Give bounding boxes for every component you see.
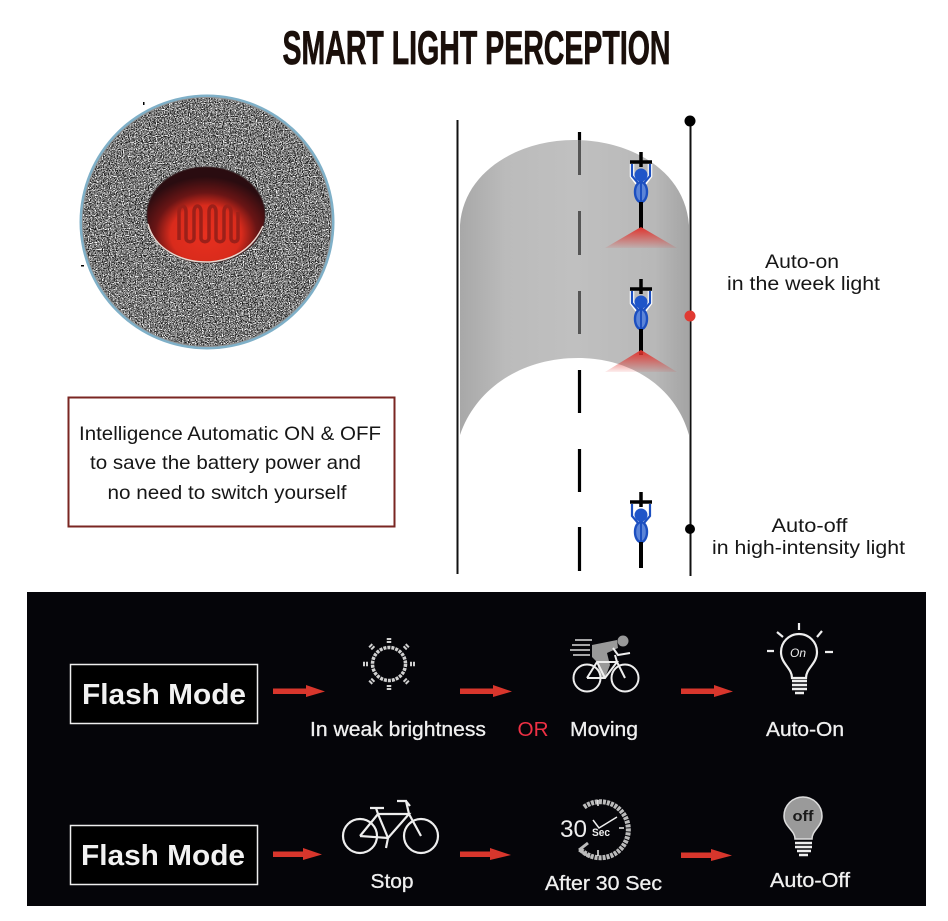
callout: battery text box: [68, 398, 394, 526]
label: after 30 sec: After 30 Sec: [545, 872, 662, 895]
icon: bulb off: [784, 797, 822, 855]
button: flash mode row 2: Flash Mode: [81, 840, 245, 872]
chart: road diagram: [458, 116, 696, 576]
arrow: [273, 685, 325, 697]
icon: bulb on: On: [790, 646, 806, 660]
arrow: [681, 685, 733, 697]
label: auto-on: Auto-on: [765, 251, 839, 273]
icon: parked bicycle: [343, 801, 438, 853]
callout: battery text box: to save the battery power and: [90, 452, 361, 474]
label: auto-off: in high-intensity light: [712, 537, 906, 559]
cyclist 1 with rear light: [605, 152, 677, 248]
callout: battery text box: Intelligence Automatic ON & OFF: [79, 423, 381, 445]
road centre dashes: [578, 140, 581, 334]
cyclist 3 without light: [630, 492, 652, 568]
icon: 30 second timer: [560, 800, 628, 858]
light beam area on road: [460, 140, 689, 435]
arrow: [460, 848, 511, 860]
arrow: [273, 848, 322, 860]
label: weak brightness: In weak brightness: [310, 718, 486, 741]
label: moving: Moving: [570, 718, 638, 741]
button: flash mode row 2: [70, 826, 258, 884]
label: auto-on: in the week light: [727, 273, 881, 295]
cyclist 2 with rear light: [605, 279, 677, 372]
panel: flash mode flow: [27, 592, 926, 906]
icon: 30 second timer: Sec: [592, 827, 610, 839]
title: SMART LIGHT PERCEPTION: [282, 21, 670, 74]
label: auto-off: Auto-Off: [770, 869, 850, 892]
icon: 30 second timer: 30: [560, 816, 587, 843]
label: or: OR: [518, 718, 548, 741]
icon: sun: [363, 638, 415, 690]
status dots: [684, 116, 696, 126]
road edge lines: [458, 120, 690, 576]
icon: bulb off: off: [792, 808, 815, 825]
arrow: [460, 685, 512, 697]
icon: bulb on: [767, 623, 833, 693]
icon: moving cyclist: [570, 636, 638, 692]
label: auto-off: [712, 515, 906, 559]
callout: battery text box: no need to switch yourself: [108, 482, 347, 504]
arrow: [681, 849, 732, 861]
icon: light sensor close-up: [80, 94, 334, 350]
button: flash mode row 1: [70, 664, 258, 724]
label: auto-on: Auto-On: [766, 718, 844, 741]
label: auto-off: Auto-off: [772, 515, 848, 537]
label: stop: Stop: [370, 870, 414, 893]
label: auto-on: [727, 251, 881, 295]
button: flash mode row 1: Flash Mode: [82, 679, 246, 711]
